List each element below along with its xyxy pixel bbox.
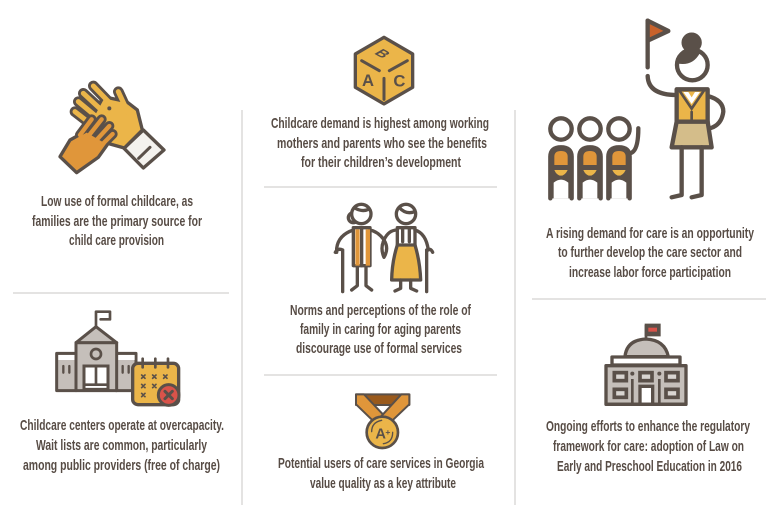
text: childcare centers overcapacity (20, 417, 224, 474)
icon: ABC block (355, 37, 413, 104)
icon: clasped hands (60, 86, 164, 173)
text: childcare demand: Childcare demand is highest among working (271, 115, 489, 132)
text: norms and perceptions: discourage use of formal services (296, 340, 462, 357)
text: norms and perceptions: family in caring for aging parents (300, 321, 461, 338)
text: ongoing efforts (546, 418, 750, 475)
text: low use of formal childcare: families are the primary source for (32, 213, 202, 230)
text: potential users: value quality as a key attribute (310, 475, 456, 492)
text: childcare demand: for their children’s development (301, 154, 461, 171)
icon: school and calendar (57, 312, 179, 405)
text: norms and perceptions: Norms and perceptions of the role of (290, 302, 472, 319)
icon: A+ medal: A (375, 426, 386, 442)
text: childcare centers overcapacity: Wait lists are common, particularly (36, 437, 207, 454)
icon: A+ medal: + (385, 427, 390, 437)
text: low use of formal childcare (32, 193, 202, 249)
text: potential users (278, 455, 484, 492)
text: childcare demand: mothers and parents who see the benefits (277, 135, 487, 152)
icon: ABC block: A (362, 71, 374, 90)
icon: ABC block: C (393, 72, 405, 91)
text: potential users: Potential users of care services in Georgia (278, 455, 484, 472)
icon: ABC block: B (370, 47, 393, 61)
icon: elderly couple (335, 204, 433, 292)
text: low use of formal childcare: Low use of formal childcare, as (41, 193, 193, 210)
text: norms and perceptions (290, 302, 472, 357)
text: rising demand for care (546, 225, 754, 281)
icon: teacher with children (550, 21, 723, 198)
text: childcare centers overcapacity: among public providers (free of charge) (23, 457, 220, 474)
text: childcare centers overcapacity: Childcare centers operate at overcapacity. (20, 417, 224, 434)
text: low use of formal childcare: child care provision (69, 232, 164, 249)
icon: government building (605, 324, 687, 404)
text: childcare demand (271, 115, 489, 171)
icon: A+ medal (356, 394, 409, 448)
